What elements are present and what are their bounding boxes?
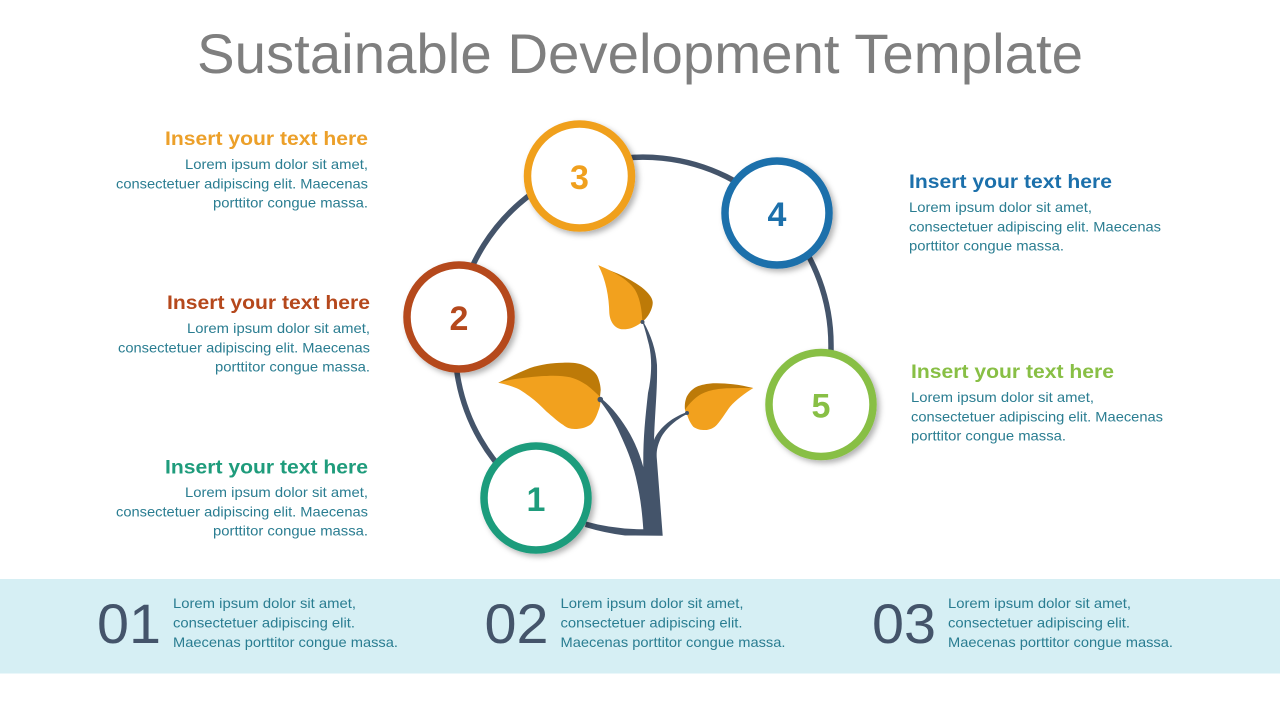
text block: step 5	[911, 361, 1163, 444]
band item 01: Lorem ipsum dolor sit amet,	[173, 595, 356, 611]
band item 02	[484, 592, 786, 655]
text block: step 2: porttitor congue massa.	[215, 358, 370, 374]
band item 01: Maecenas porttitor congue massa.	[173, 634, 398, 650]
step 1 circle: 1	[527, 481, 545, 519]
text block: step 2	[118, 292, 370, 374]
band item 02: consectetuer adipiscing elit.	[560, 614, 742, 630]
text block: step 4: porttitor congue massa.	[909, 238, 1064, 254]
text block: step 4: Insert your text here	[909, 171, 1112, 193]
text block: step 5: Lorem ipsum dolor sit amet,	[911, 389, 1094, 405]
band item 01: consectetuer adipiscing elit.	[173, 614, 355, 630]
step 1 circle	[484, 446, 588, 550]
band item 03	[872, 592, 1173, 655]
text block: step 2: Lorem ipsum dolor sit amet,	[187, 320, 370, 336]
band item 02: Maecenas porttitor congue massa.	[560, 634, 786, 650]
band item 02: Lorem ipsum dolor sit amet,	[560, 595, 744, 611]
stem	[585, 322, 687, 536]
band item 01	[97, 592, 398, 655]
text block: step 3: Lorem ipsum dolor sit amet,	[185, 156, 368, 172]
step 3 circle: 3	[570, 159, 589, 197]
band item 03: consectetuer adipiscing elit.	[948, 614, 1130, 630]
text block: step 4	[909, 171, 1161, 254]
text block: step 2: consectetuer adipiscing elit. Maecenas	[118, 340, 370, 356]
band item 02: 02	[484, 592, 548, 655]
ring connecting the five steps	[455, 157, 831, 524]
band item 03: 03	[872, 592, 936, 655]
text block: step 4: Lorem ipsum dolor sit amet,	[909, 199, 1092, 215]
text block: step 1: consectetuer adipiscing elit. Maecenas	[116, 504, 368, 520]
text block: step 3	[116, 128, 368, 210]
leaf: right	[685, 383, 753, 430]
text block: step 1: Insert your text here	[165, 456, 368, 478]
step 2 circle: 2	[450, 300, 468, 338]
bottom band	[0, 579, 1280, 674]
text block: step 5: consectetuer adipiscing elit. Maecenas	[911, 408, 1163, 424]
step 5 circle: 5	[812, 388, 830, 426]
step 5 circle	[769, 352, 873, 456]
text block: step 1	[116, 456, 368, 538]
text block: step 2: Insert your text here	[167, 292, 370, 314]
text block: step 1: porttitor congue massa.	[213, 522, 368, 538]
leaf: top	[598, 265, 653, 329]
band item 03: Lorem ipsum dolor sit amet,	[948, 595, 1131, 611]
step 4 circle	[725, 161, 829, 265]
text block: step 3: Insert your text here	[165, 128, 368, 150]
sapling illustration	[498, 265, 753, 536]
text block: step 5: porttitor congue massa.	[911, 428, 1066, 444]
step 4 circle: 4	[768, 196, 787, 234]
stem nodes	[598, 320, 689, 415]
text block: step 3: porttitor congue massa.	[213, 194, 368, 210]
text block: step 4: consectetuer adipiscing elit. Maecenas	[909, 218, 1161, 234]
band item 01: 01	[97, 592, 161, 655]
text block: step 3: consectetuer adipiscing elit. Maecenas	[116, 176, 368, 192]
leaf: left	[498, 363, 601, 429]
text block: step 1: Lorem ipsum dolor sit amet,	[185, 484, 368, 500]
title: Sustainable Development Template	[197, 22, 1083, 85]
step 2 circle	[407, 265, 511, 369]
band item 03: Maecenas porttitor congue massa.	[948, 634, 1173, 650]
text block: step 5: Insert your text here	[911, 361, 1114, 383]
step 3 circle	[528, 124, 632, 228]
